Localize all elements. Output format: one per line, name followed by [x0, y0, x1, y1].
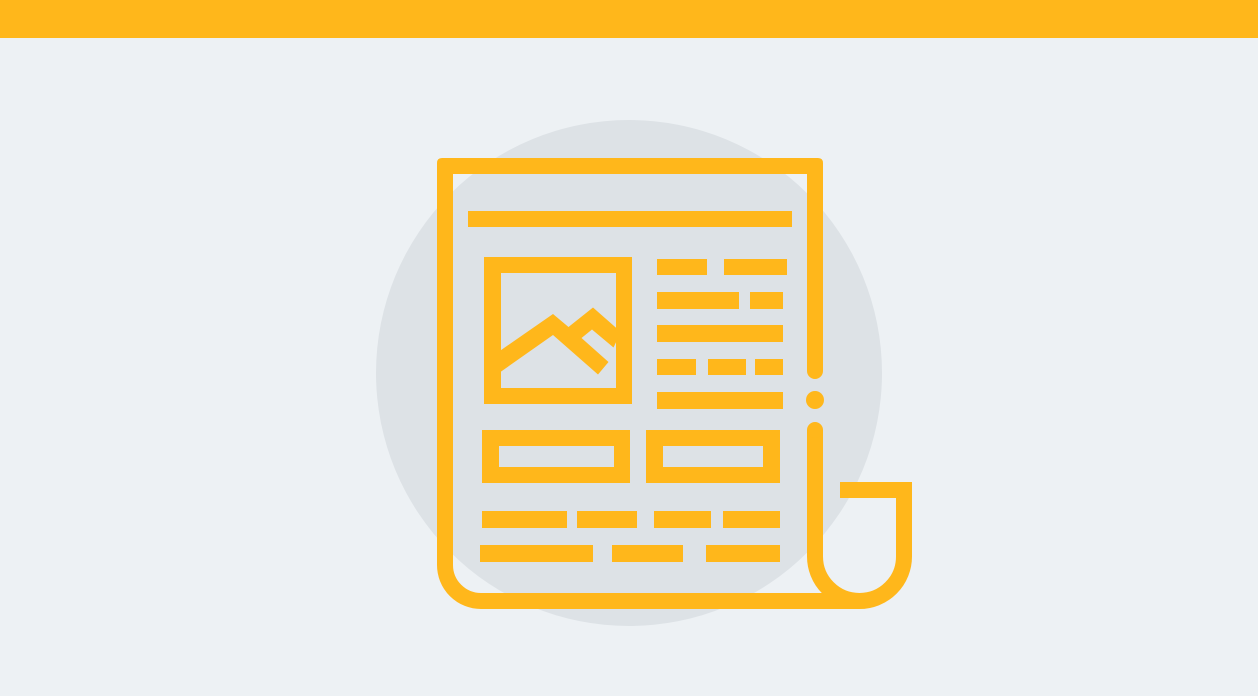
rolled page curl — [815, 430, 904, 601]
page edge dot — [806, 391, 824, 409]
page outline: bottom edge and left curve — [445, 565, 860, 601]
background circle — [376, 120, 882, 626]
right subheading box — [646, 430, 780, 483]
left subheading box — [482, 430, 630, 483]
bottom text lines — [480, 511, 780, 562]
photo frame with mountains — [484, 257, 632, 404]
mountain glyph — [499, 308, 618, 374]
top banner — [0, 0, 1258, 38]
icon: newspaper — [437, 158, 904, 601]
article text lines beside photo — [657, 259, 787, 409]
round cap of page curl — [807, 422, 823, 438]
page outline: top, left and upper right edge — [437, 158, 823, 565]
headline bar — [468, 211, 792, 227]
